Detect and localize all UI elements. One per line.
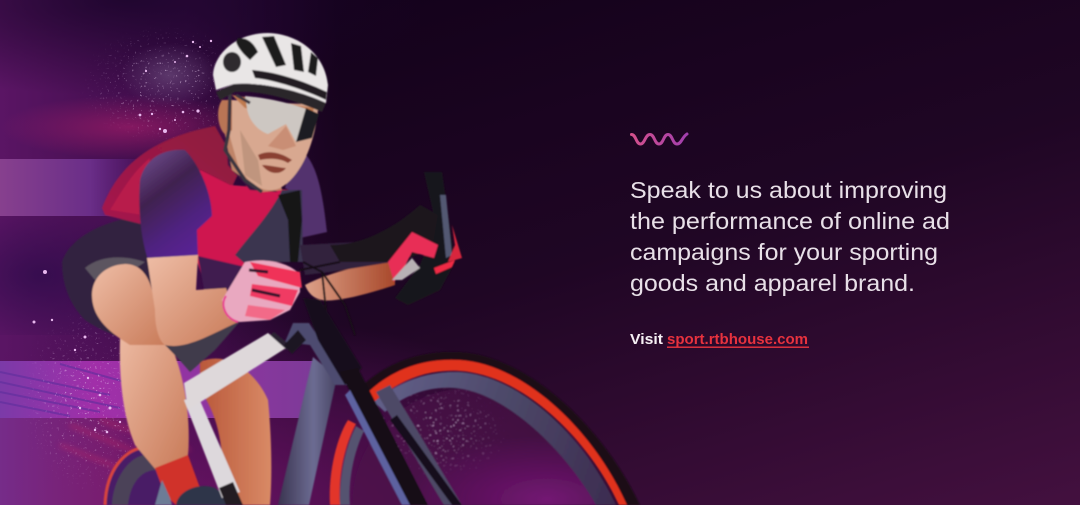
rear wheel [105,447,172,505]
translucent speed bands [0,159,316,480]
wave icon [632,134,687,144]
jersey right shoulder [285,148,327,238]
moustache and mouth [258,152,292,173]
shorts [62,215,250,372]
main message [630,177,950,296]
main message: goods and apparel brand. [630,270,915,296]
front arm [300,240,395,300]
cyclist and bicycle illustration [62,33,640,505]
white top tube [184,330,306,410]
shoe [155,480,240,505]
front fork and frame [278,298,462,505]
face [218,95,318,190]
front wheel [330,352,640,505]
handlebar cables [300,262,355,335]
brake lever and dark sleeve [235,190,303,268]
main message: campaigns for your sporting [630,239,938,265]
neck [222,120,282,192]
helmet straps [225,92,262,192]
sunglasses [236,95,319,142]
main message: Speak to us about improving [630,177,947,203]
red sock [155,455,200,505]
helmet [213,33,328,112]
jersey purple sleeve [139,150,212,260]
jersey torso [195,130,297,300]
right lower leg [200,358,271,505]
front glove [222,261,302,322]
link underline [667,346,809,348]
visit call to action: Visit [630,332,663,348]
main message: the performance of online ad [630,208,950,234]
handlebar and hood [330,172,455,305]
visit call to action [630,332,808,348]
particle dust [10,20,260,505]
rear arm and forearm [147,255,238,346]
link: sport.rtbhouse.com [667,332,808,348]
thigh and knee [92,264,168,345]
left lower leg [120,320,189,470]
white seat tube [184,396,243,505]
rear glove [388,225,462,282]
jersey back panel [102,126,240,245]
